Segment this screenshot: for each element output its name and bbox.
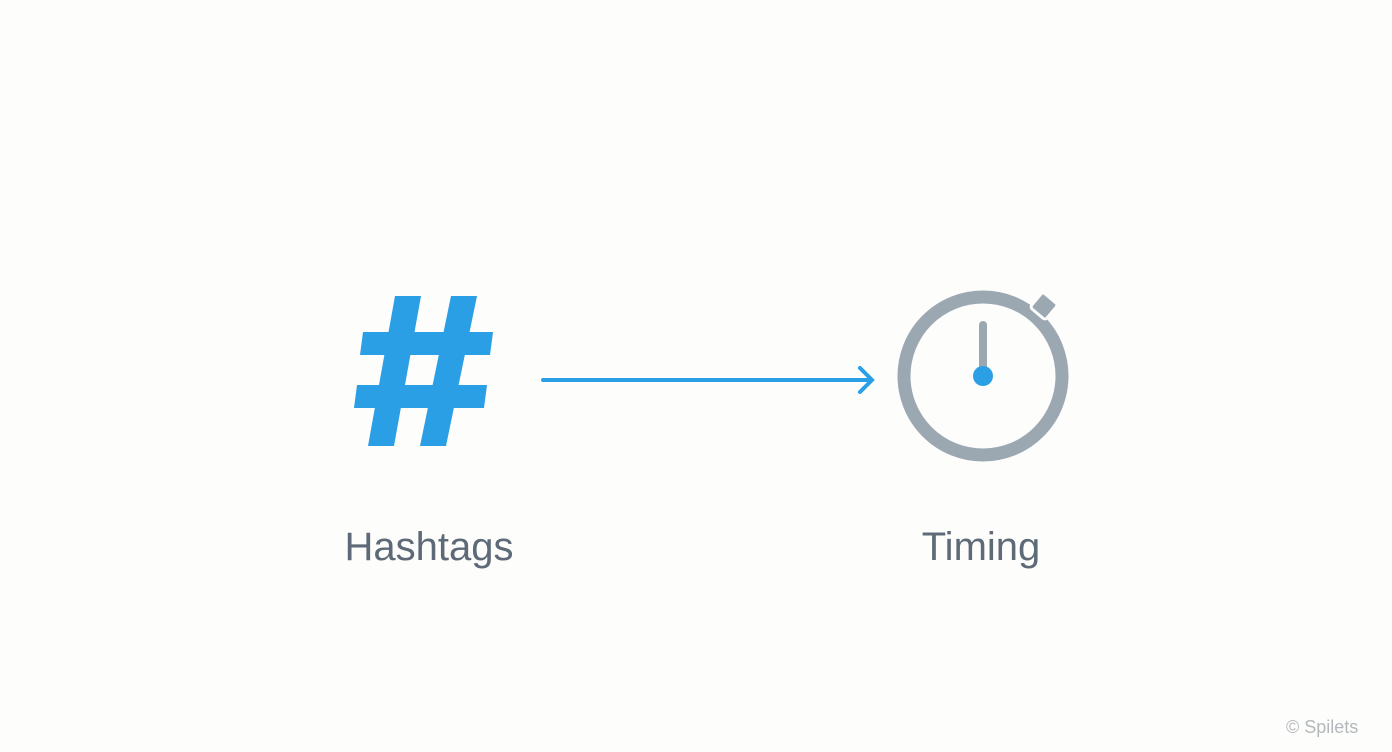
label: Hashtags: Hashtags (345, 525, 513, 569)
credit: © Spilets (1286, 717, 1358, 737)
label: Timing: Timing (922, 525, 1040, 569)
icon: stopwatch (904, 292, 1062, 455)
arrow (543, 368, 872, 392)
icon: hashtag (354, 296, 493, 446)
